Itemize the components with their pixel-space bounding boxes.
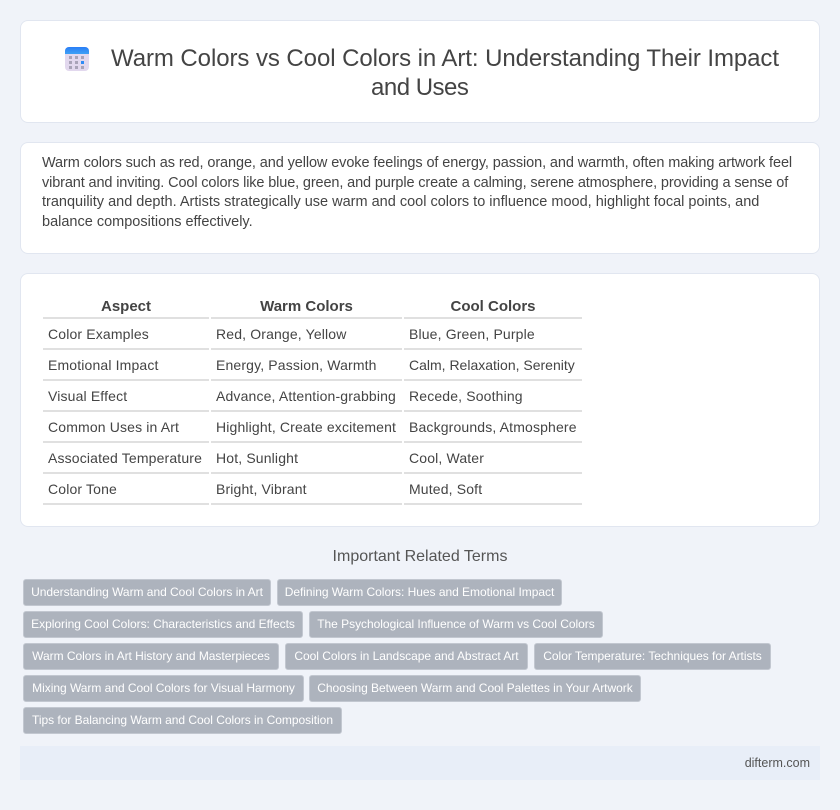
comparison table: Highlight, Create excitement bbox=[216, 419, 396, 435]
panel: comparison table card bbox=[20, 273, 820, 527]
comparison table: Bright, Vibrant bbox=[216, 481, 307, 497]
related terms tags: Defining Warm Colors: Hues and Emotional Impact bbox=[285, 585, 554, 599]
comparison table: Cool Colors bbox=[450, 298, 536, 315]
comparison table: Advance, Attention-grabbing bbox=[216, 388, 396, 404]
intro paragraph: Warm colors such as red, orange, and yellow evoke feelings of energy, passion, and warmth, often making artwork feel bbox=[42, 155, 792, 171]
panel: title card bbox=[20, 20, 820, 123]
comparison table bbox=[43, 298, 582, 505]
comparison table: Energy, Passion, Warmth bbox=[216, 357, 377, 373]
heading: related terms: Important Related Terms bbox=[333, 548, 507, 565]
panel: intro text card bbox=[20, 142, 820, 254]
related terms tags: Color Temperature: Techniques for Artists bbox=[543, 649, 762, 663]
related terms tags bbox=[23, 579, 771, 734]
footer bar bbox=[20, 746, 820, 780]
comparison table: Color Tone bbox=[48, 481, 117, 497]
related terms tags: Exploring Cool Colors: Characteristics and Effects bbox=[31, 617, 295, 631]
intro paragraph bbox=[42, 155, 792, 230]
comparison table: Emotional Impact bbox=[48, 357, 159, 373]
related terms tags: Choosing Between Warm and Cool Palettes in Your Artwork bbox=[317, 681, 633, 695]
icon: calendar bbox=[65, 47, 89, 71]
comparison table: Backgrounds, Atmosphere bbox=[409, 419, 577, 435]
related terms tags: Mixing Warm and Cool Colors for Visual Harmony bbox=[32, 681, 295, 695]
title bbox=[111, 45, 779, 101]
intro paragraph: tranquility and depth. Artists strategically use warm and cool colors to influence mood, highlight focal points, and bbox=[42, 194, 759, 210]
comparison table: Cool, Water bbox=[409, 450, 484, 466]
comparison table: Color Examples bbox=[48, 326, 149, 342]
intro paragraph: vibrant and inviting. Cool colors like blue, green, and purple create a calming, serene atmosphere, providing a sense of bbox=[42, 175, 788, 191]
related terms tags: Understanding Warm and Cool Colors in Art bbox=[31, 585, 263, 599]
related terms tags: The Psychological Influence of Warm vs Cool Colors bbox=[317, 617, 595, 631]
comparison table: Blue, Green, Purple bbox=[409, 326, 535, 342]
related terms tags: Warm Colors in Art History and Masterpieces bbox=[32, 649, 270, 663]
intro paragraph: balance compositions effectively. bbox=[42, 214, 253, 230]
comparison table: Calm, Relaxation, Serenity bbox=[409, 357, 575, 373]
footer credit: difterm.com bbox=[745, 756, 810, 770]
title: and Uses bbox=[371, 74, 468, 101]
related terms tags: Tips for Balancing Warm and Cool Colors in Composition bbox=[32, 713, 333, 727]
comparison table: Aspect bbox=[101, 298, 151, 315]
related terms tags: Cool Colors in Landscape and Abstract Art bbox=[294, 649, 519, 663]
comparison table: Associated Temperature bbox=[48, 450, 202, 466]
comparison table: Visual Effect bbox=[48, 388, 127, 404]
comparison table: Hot, Sunlight bbox=[216, 450, 298, 466]
comparison table: Common Uses in Art bbox=[48, 419, 179, 435]
comparison table: Warm Colors bbox=[260, 298, 353, 315]
comparison table: Red, Orange, Yellow bbox=[216, 326, 346, 342]
comparison table: Recede, Soothing bbox=[409, 388, 523, 404]
title: Warm Colors vs Cool Colors in Art: Understanding Their Impact bbox=[111, 45, 779, 72]
comparison table: Muted, Soft bbox=[409, 481, 482, 497]
